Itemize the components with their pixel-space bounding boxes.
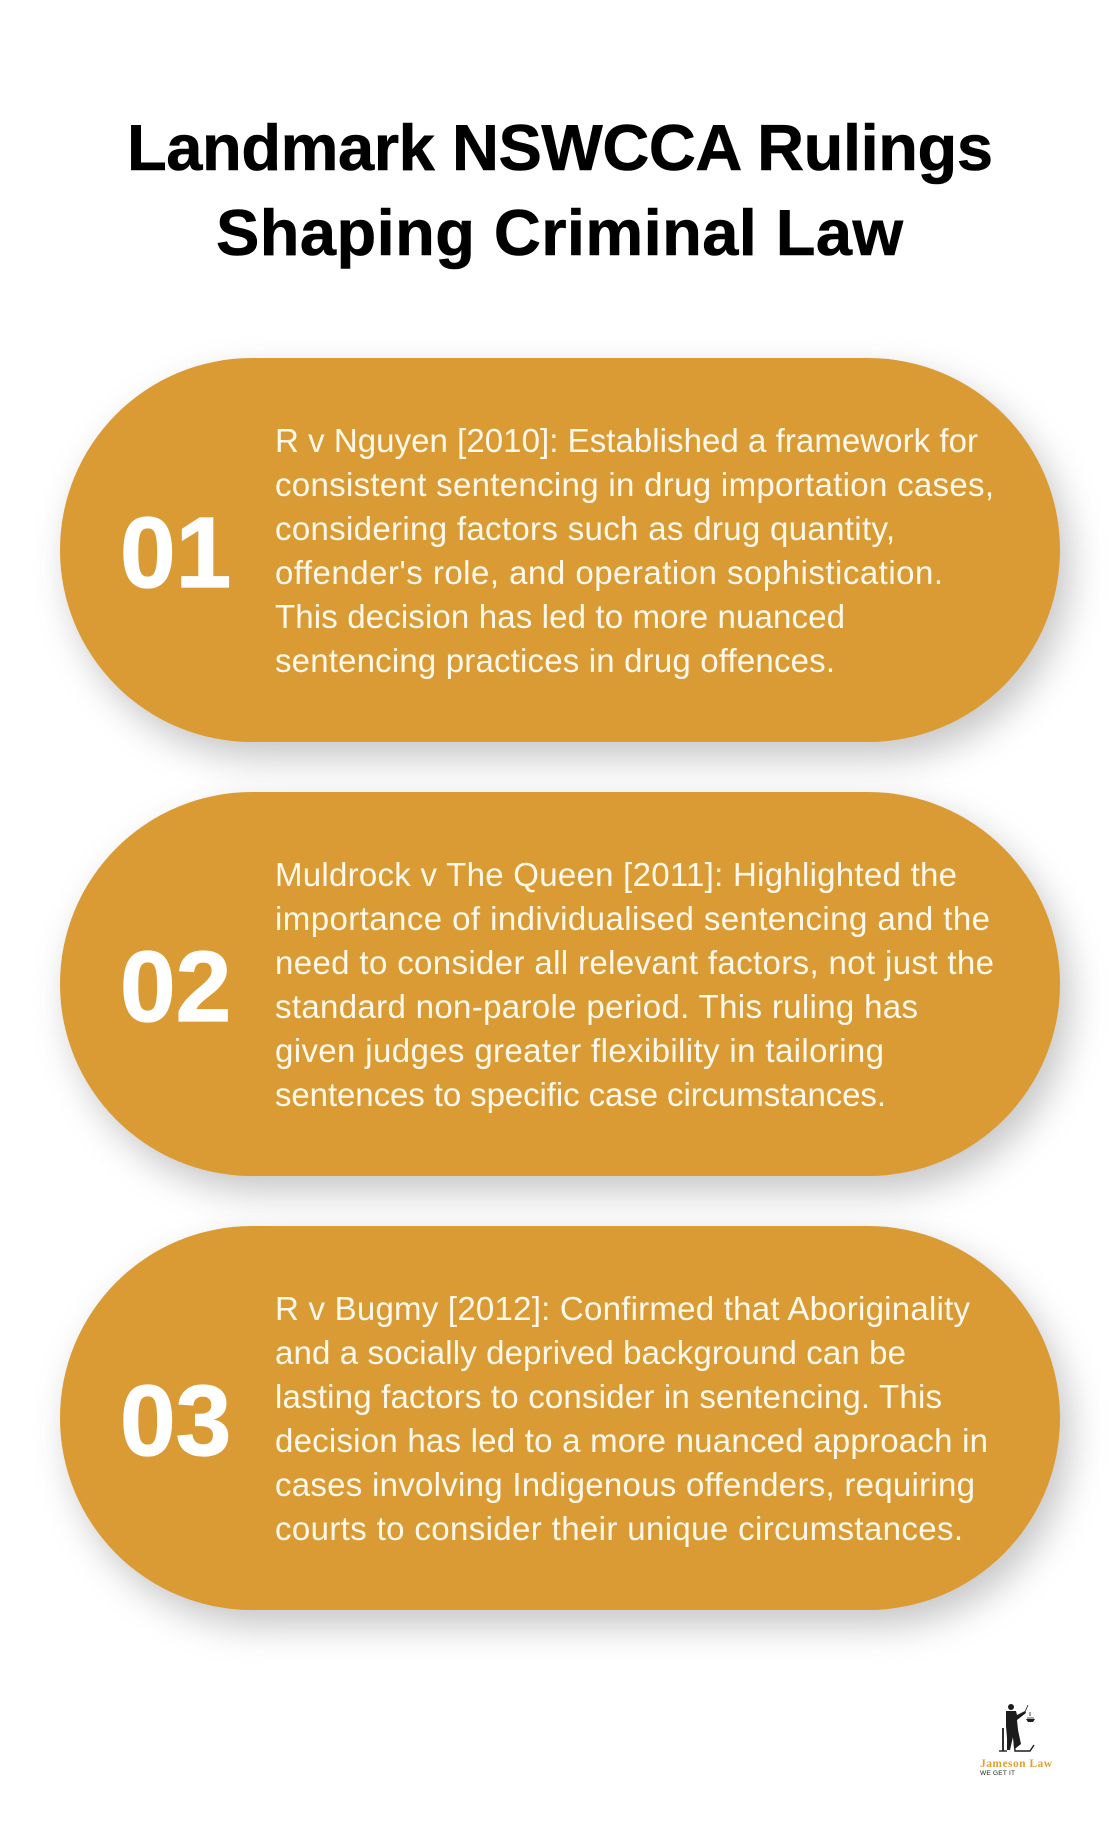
text: ruling 03 description: cases involving Indigenous offenders, requiring — [275, 1466, 975, 1503]
text: ruling 03 description — [275, 1290, 988, 1547]
text: ruling 02 description: standard non-parole period. This ruling has — [275, 988, 918, 1025]
text: ruling 01 description: considering factors such as drug quantity, — [275, 510, 895, 547]
panel: ruling 01 — [60, 358, 1070, 758]
text: ruling 01 description — [275, 422, 994, 679]
panel: ruling 03 — [60, 1226, 1070, 1626]
text: ruling 03 description: R v Bugmy [2012]: Confirmed that Aboriginality — [275, 1290, 970, 1327]
text: ruling 02 description — [275, 856, 994, 1113]
text: ruling 01 description: consistent sentencing in drug importation cases, — [275, 466, 994, 503]
number 02: 02 — [120, 931, 231, 1043]
text: ruling 01 description: This decision has led to more nuanced — [275, 598, 845, 635]
number 03: 03 — [120, 1365, 231, 1477]
text: ruling 02 description: given judges greater flexibility in tailoring — [275, 1032, 884, 1069]
text: ruling 01 description: R v Nguyen [2010]: Established a framework for — [275, 422, 978, 459]
text: ruling 03 description: and a socially deprived background can be — [275, 1334, 906, 1371]
logo: Jameson Law — [980, 1704, 1053, 1777]
text: ruling 03 description: lasting factors to consider in sentencing. This — [275, 1378, 942, 1415]
text: ruling 02 description: importance of individualised sentencing and the — [275, 900, 990, 937]
text: ruling 02 description: sentences to specific case circumstances. — [275, 1076, 886, 1113]
title: Shaping Criminal Law — [216, 196, 903, 269]
icon: figure of justice holding scales — [999, 1704, 1035, 1751]
text: ruling 02 description: Muldrock v The Queen [2011]: Highlighted the — [275, 856, 957, 893]
panel: ruling 02 — [60, 792, 1070, 1192]
text: Jameson Law: Jameson Law — [980, 1758, 1053, 1770]
number 01: 01 — [120, 497, 231, 609]
text: ruling 03 description: courts to consider their unique circumstances. — [275, 1510, 963, 1547]
text: ruling 03 description: decision has led to a more nuanced approach in — [275, 1422, 988, 1459]
text: ruling 01 description: offender's role, and operation sophistication. — [275, 554, 943, 591]
text: ruling 02 description: need to consider all relevant factors, not just the — [275, 944, 994, 981]
title — [127, 111, 993, 269]
text: WE GET IT: WE GET IT — [980, 1770, 1015, 1777]
text: ruling 01 description: sentencing practices in drug offences. — [275, 642, 835, 679]
title: Landmark NSWCCA Rulings — [127, 111, 993, 184]
